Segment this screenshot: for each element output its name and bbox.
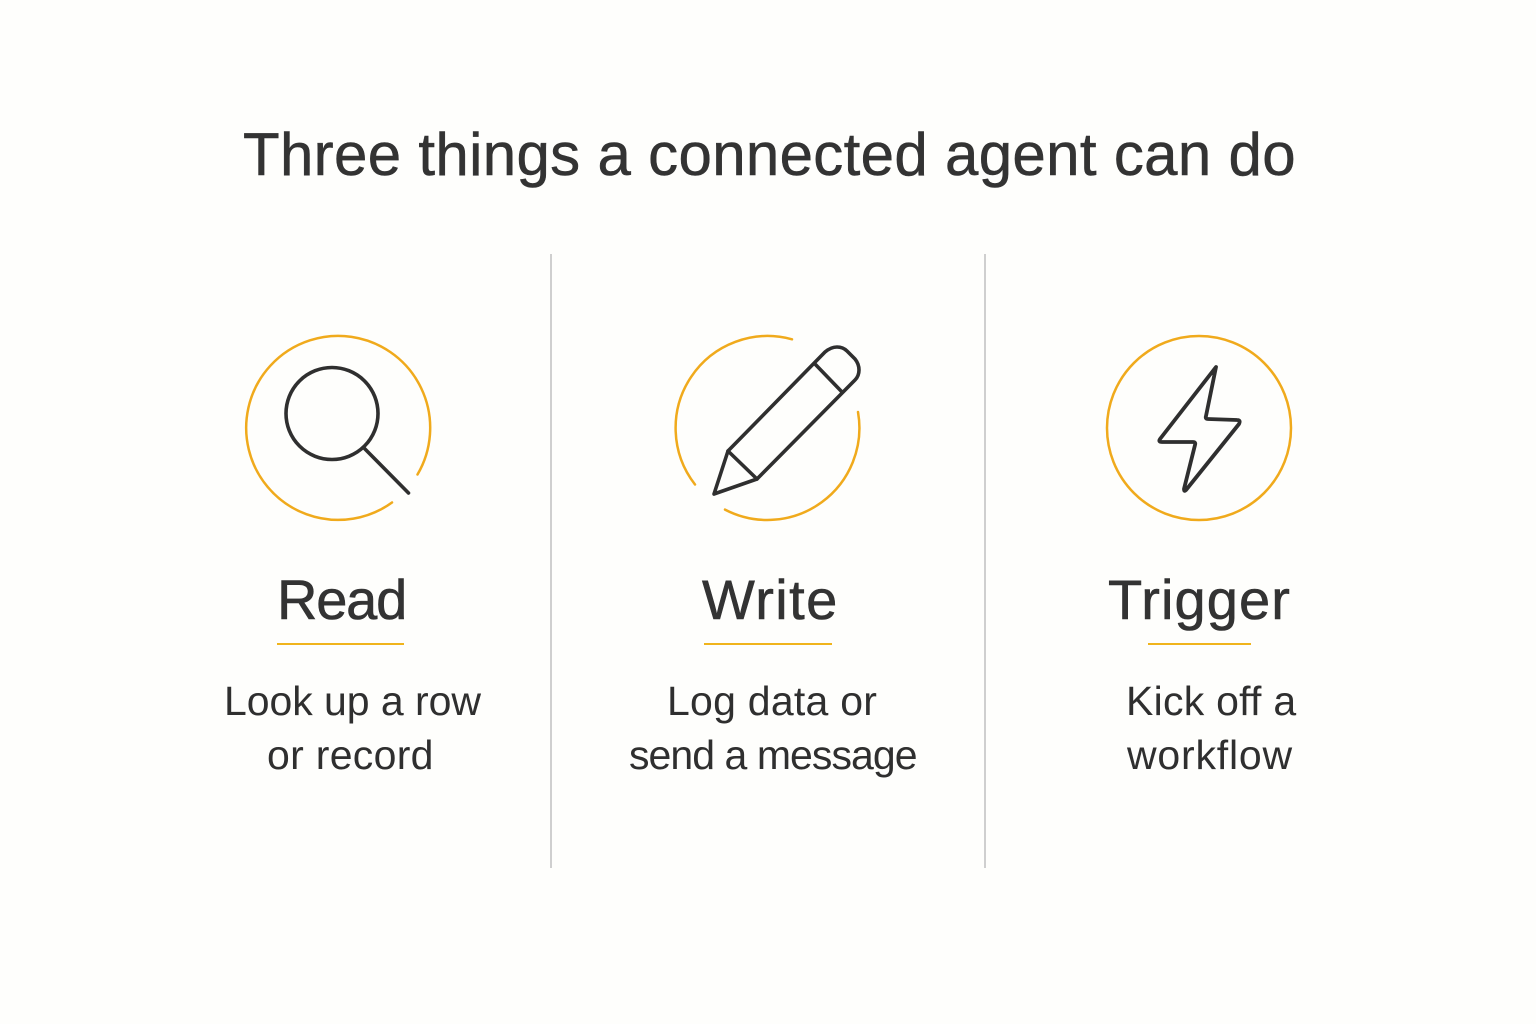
icon: lightning bolt — [1107, 336, 1291, 520]
title: Three things a connected agent can do — [243, 121, 1296, 188]
heading: read: Read — [277, 568, 406, 631]
text: read description line 2: or record — [267, 732, 434, 778]
heading: write: Write — [702, 568, 839, 631]
heading: trigger: Trigger — [1108, 568, 1291, 631]
text: trigger description line 2: workflow — [1127, 732, 1293, 778]
text: trigger description: Kick off a — [1126, 678, 1296, 724]
icon: pencil — [676, 336, 859, 520]
text: write description: Log data or — [667, 678, 877, 724]
icon: magnifying glass — [246, 336, 430, 520]
underline: trigger — [1148, 643, 1251, 645]
text: write description line 2: send a message — [629, 732, 917, 778]
underline: read — [277, 643, 404, 645]
text: read description: Look up a row — [224, 678, 481, 724]
underline: write — [704, 643, 832, 645]
